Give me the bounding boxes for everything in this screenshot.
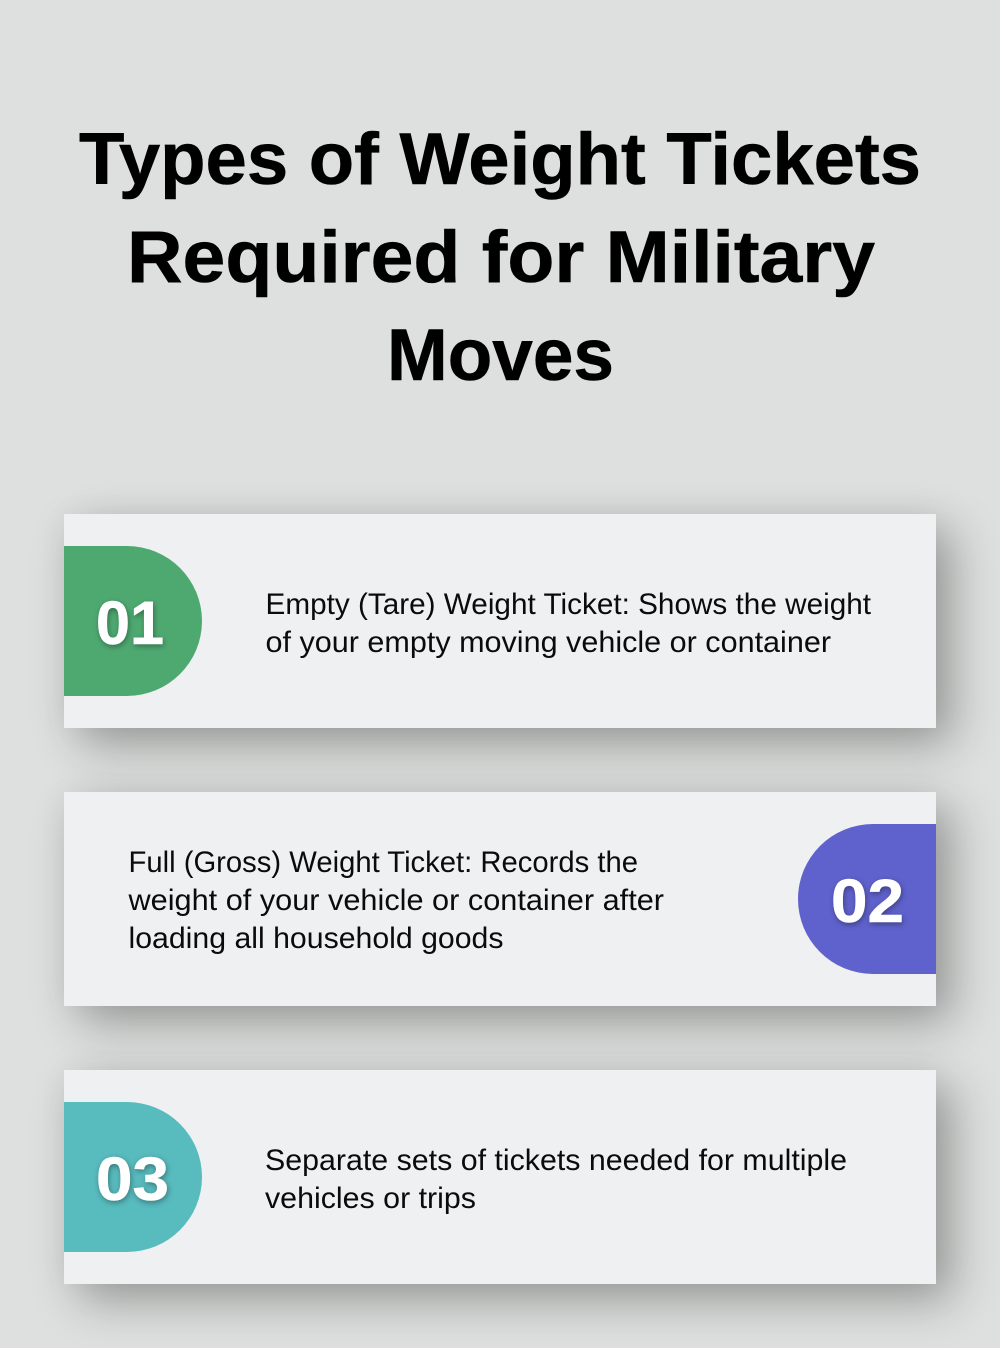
text: full weight ticket: Full (Gross) Weight Ticket: Records the xyxy=(128,846,638,879)
text: full weight ticket xyxy=(127,846,906,955)
text: empty weight ticket: Empty (Tare) Weight Ticket: Shows the weight xyxy=(266,588,872,621)
text: separate sets of tickets xyxy=(96,1144,847,1215)
title: Types of Weight Tickets xyxy=(79,119,921,200)
title: Moves xyxy=(387,315,614,396)
text: full weight ticket: weight of your vehicle or container after xyxy=(127,884,664,917)
badge: 03 xyxy=(64,1102,202,1252)
title: Required for Military xyxy=(127,217,875,298)
text: full weight ticket: loading all household goods xyxy=(128,922,503,955)
badge: 01 xyxy=(64,546,202,696)
text: empty weight ticket xyxy=(96,588,872,659)
panel: card 01 xyxy=(64,514,936,728)
panel: card 03 xyxy=(64,1070,936,1284)
panel: card 02 xyxy=(64,792,936,1006)
text: separate sets of tickets: vehicles or trips xyxy=(265,1182,476,1215)
text: separate sets of tickets: 03 xyxy=(96,1145,169,1213)
text: separate sets of tickets: Separate sets of tickets needed for multiple xyxy=(265,1144,847,1177)
text: empty weight ticket: of your empty moving vehicle or container xyxy=(266,626,831,659)
badge: 02 xyxy=(798,824,936,974)
text: empty weight ticket: 01 xyxy=(96,589,164,657)
title xyxy=(79,119,921,396)
text: full weight ticket: 02 xyxy=(831,867,904,935)
